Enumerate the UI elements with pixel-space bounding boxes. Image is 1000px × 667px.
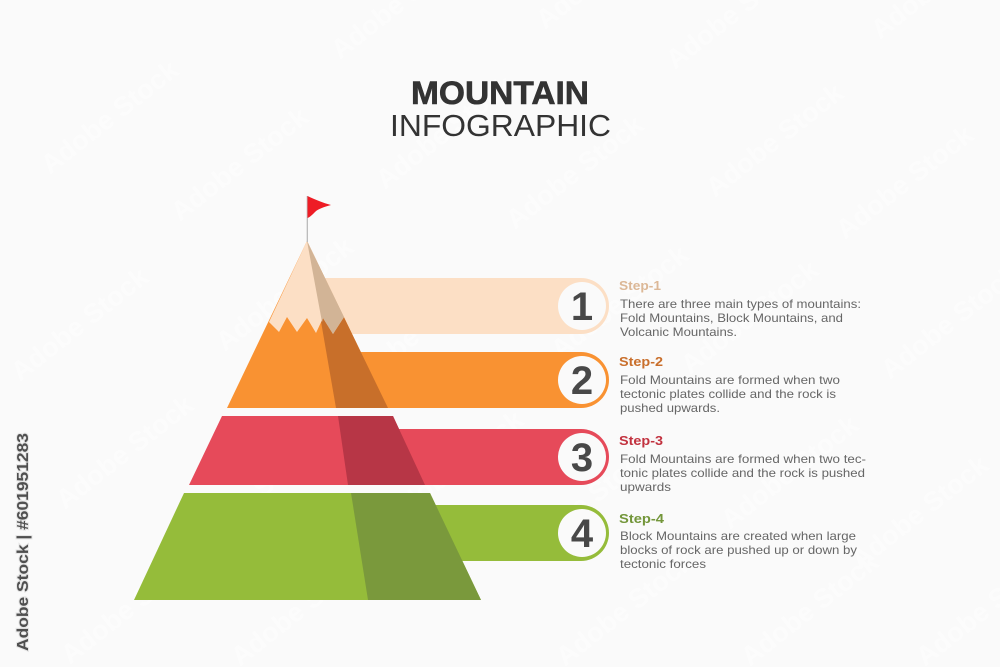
step 2 text: pushed upwards.: [620, 401, 720, 415]
step 3 text: Fold Mountains are formed when two tec-: [620, 452, 866, 466]
watermark pattern: Adobe Stock: [35, 54, 185, 180]
base tier: [134, 493, 481, 600]
step 2 text: [619, 354, 840, 415]
bar 3: 3: [571, 436, 593, 480]
title: INFOGRAPHIC: [390, 108, 611, 143]
watermark pattern: Adobe Stock: [340, 271, 490, 397]
icon: flag on summit: [307, 196, 331, 242]
bar 2: 2: [571, 359, 593, 403]
step 1 text: There are three main types of mountains:: [620, 297, 861, 311]
step 3 text: tonic plates collide and the rock is pushed: [620, 466, 865, 480]
watermark pattern: Adobe Stock: [715, 409, 865, 535]
watermark pattern: Adobe Stock: [675, 254, 825, 380]
step 2 text: tectonic plates collide and the rock is: [620, 387, 836, 401]
bar 4: [420, 505, 609, 561]
watermark pattern: Adobe Stock: [700, 77, 850, 203]
title: [390, 75, 611, 143]
step 4 text: blocks of rock are pushed up or down by: [620, 543, 857, 557]
step 4 text: Block Mountains are created when large: [620, 529, 856, 543]
watermark pattern: Adobe Stock: [380, 404, 530, 530]
watermark pattern: Adobe Stock: [50, 389, 200, 515]
step 3 text: upwards: [620, 480, 671, 494]
watermark pattern: Adobe Stock: [500, 109, 650, 235]
watermark pattern: Adobe Stock: [510, 439, 660, 565]
step 1 text: [619, 278, 861, 339]
step 1 text: Volcanic Mountains.: [620, 325, 737, 339]
bar 1: 1: [571, 285, 593, 329]
title: MOUNTAIN: [411, 75, 589, 111]
step 3 text: Step-3: [619, 433, 663, 448]
bar 3: [390, 429, 609, 485]
side credit: Adobe Stock | #601951283: [15, 433, 32, 651]
bar 4: 4: [571, 512, 594, 556]
watermark pattern: Adobe Stock: [165, 101, 315, 227]
step 2 text: Step-2: [619, 354, 663, 369]
step 1 text: Step-1: [619, 278, 661, 293]
watermark pattern: Adobe Stock: [830, 119, 980, 245]
watermark pattern: Adobe Stock: [55, 544, 205, 667]
watermark pattern: Adobe Stock: [370, 69, 520, 195]
watermark pattern: Adobe Stock: [210, 231, 360, 357]
middle tier: [189, 416, 425, 485]
step 4 text: Step-4: [619, 511, 665, 526]
peak tier with snow cap: [227, 241, 388, 408]
step 3 text: [619, 433, 866, 494]
step 2 text: Fold Mountains are formed when two: [620, 373, 840, 387]
bar 1: [310, 278, 609, 334]
watermark pattern: Adobe Stock: [545, 239, 695, 365]
step 1 text: Fold Mountains, Block Mountains, and: [620, 311, 843, 325]
bar 2: [350, 352, 609, 408]
step 4 text: [619, 511, 857, 571]
watermark pattern: Adobe Stock: [5, 261, 155, 387]
mountain pyramid: [134, 241, 481, 600]
watermark pattern: Adobe Stock: [175, 434, 325, 560]
watermark pattern: Adobe Stock: [845, 449, 995, 575]
step 4 text: tectonic forces: [620, 557, 706, 571]
